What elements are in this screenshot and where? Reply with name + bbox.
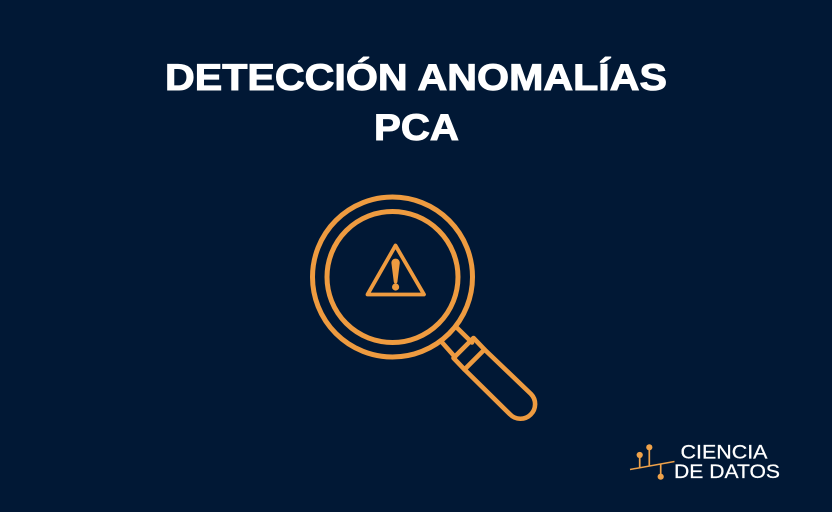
outer lens ring: [312, 197, 472, 357]
icon: magnifying glass with warning sign: [312, 197, 535, 419]
exclamation mark: [391, 259, 400, 291]
logo text line 2: DE DATOS: [674, 462, 780, 483]
logo text: [674, 442, 780, 483]
magnifier neck: [442, 328, 472, 357]
title: [165, 56, 667, 148]
logo: Ciencia de Datos: [630, 442, 780, 483]
magnifier handle: [464, 350, 535, 419]
icon: warning triangle: [368, 246, 424, 294]
title line 1: DETECCIÓN ANOMALÍAS: [165, 56, 667, 98]
logo text line 1: CIENCIA: [680, 442, 768, 463]
title line 2: PCA: [374, 107, 459, 148]
magnifier collar: [454, 338, 484, 370]
logo icon: data nodes: [630, 444, 674, 480]
inner lens ring: [327, 212, 458, 342]
